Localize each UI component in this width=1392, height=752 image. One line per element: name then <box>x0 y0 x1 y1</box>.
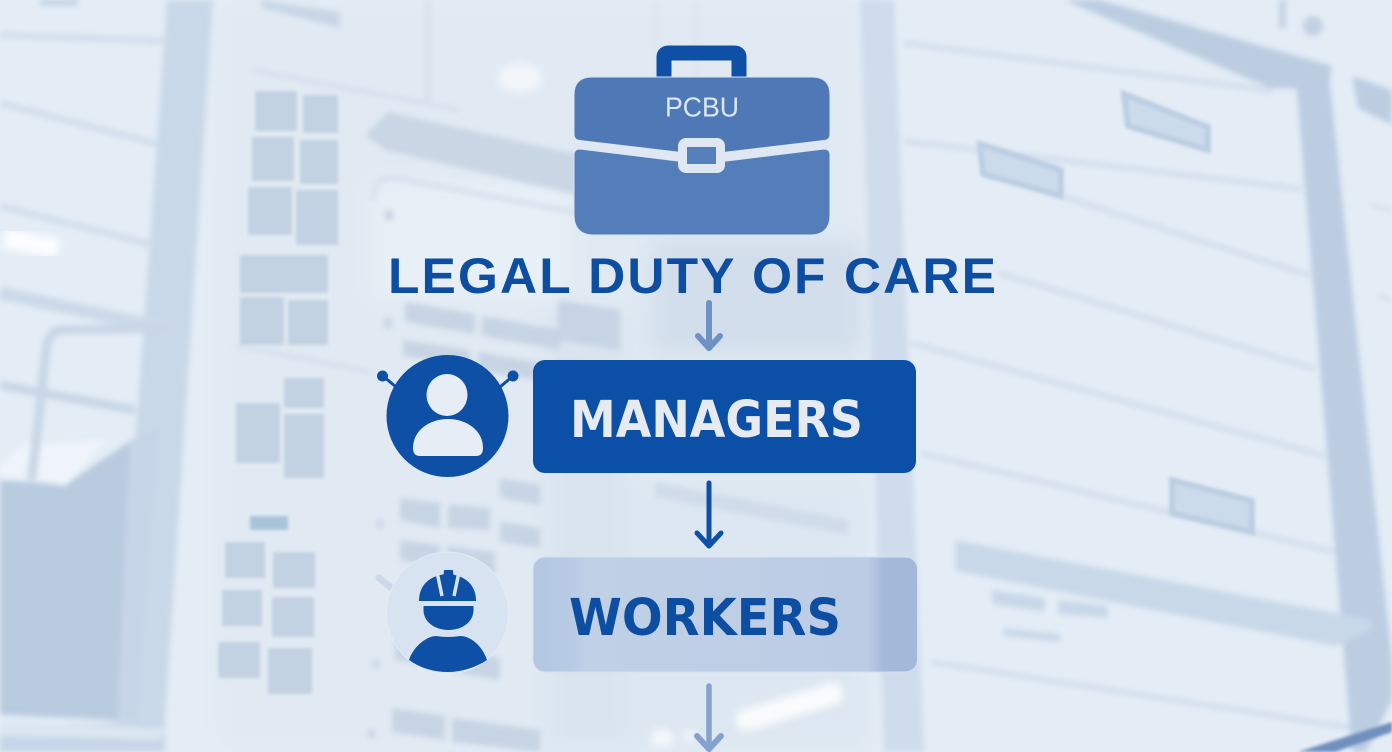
briefcase upper body <box>574 77 830 155</box>
manager antennas <box>378 372 517 392</box>
arrow: workers onward <box>697 686 721 749</box>
briefcase lower body <box>574 149 830 235</box>
arrow: managers to workers <box>697 483 721 546</box>
hard hat <box>419 570 476 601</box>
icon: worker <box>379 552 508 674</box>
briefcase strap <box>574 144 830 160</box>
manager shoulders <box>413 419 483 456</box>
worker face <box>424 606 474 630</box>
box: workers <box>533 557 918 672</box>
icon: PCBU briefcase <box>574 53 830 235</box>
arrow: duty to managers <box>698 303 720 348</box>
box: workers: WORKERS <box>569 588 841 647</box>
PCBU label: PCBU <box>665 92 739 122</box>
briefcase handle <box>664 53 739 77</box>
briefcase buckle <box>678 138 725 173</box>
box: managers <box>533 360 916 473</box>
manager head <box>426 374 468 416</box>
heading: legal duty of care: LEGAL DUTY OF CARE <box>388 248 998 304</box>
box: managers: MANAGERS <box>570 390 863 449</box>
worker shoulders <box>409 636 487 672</box>
icon: manager <box>378 355 517 477</box>
